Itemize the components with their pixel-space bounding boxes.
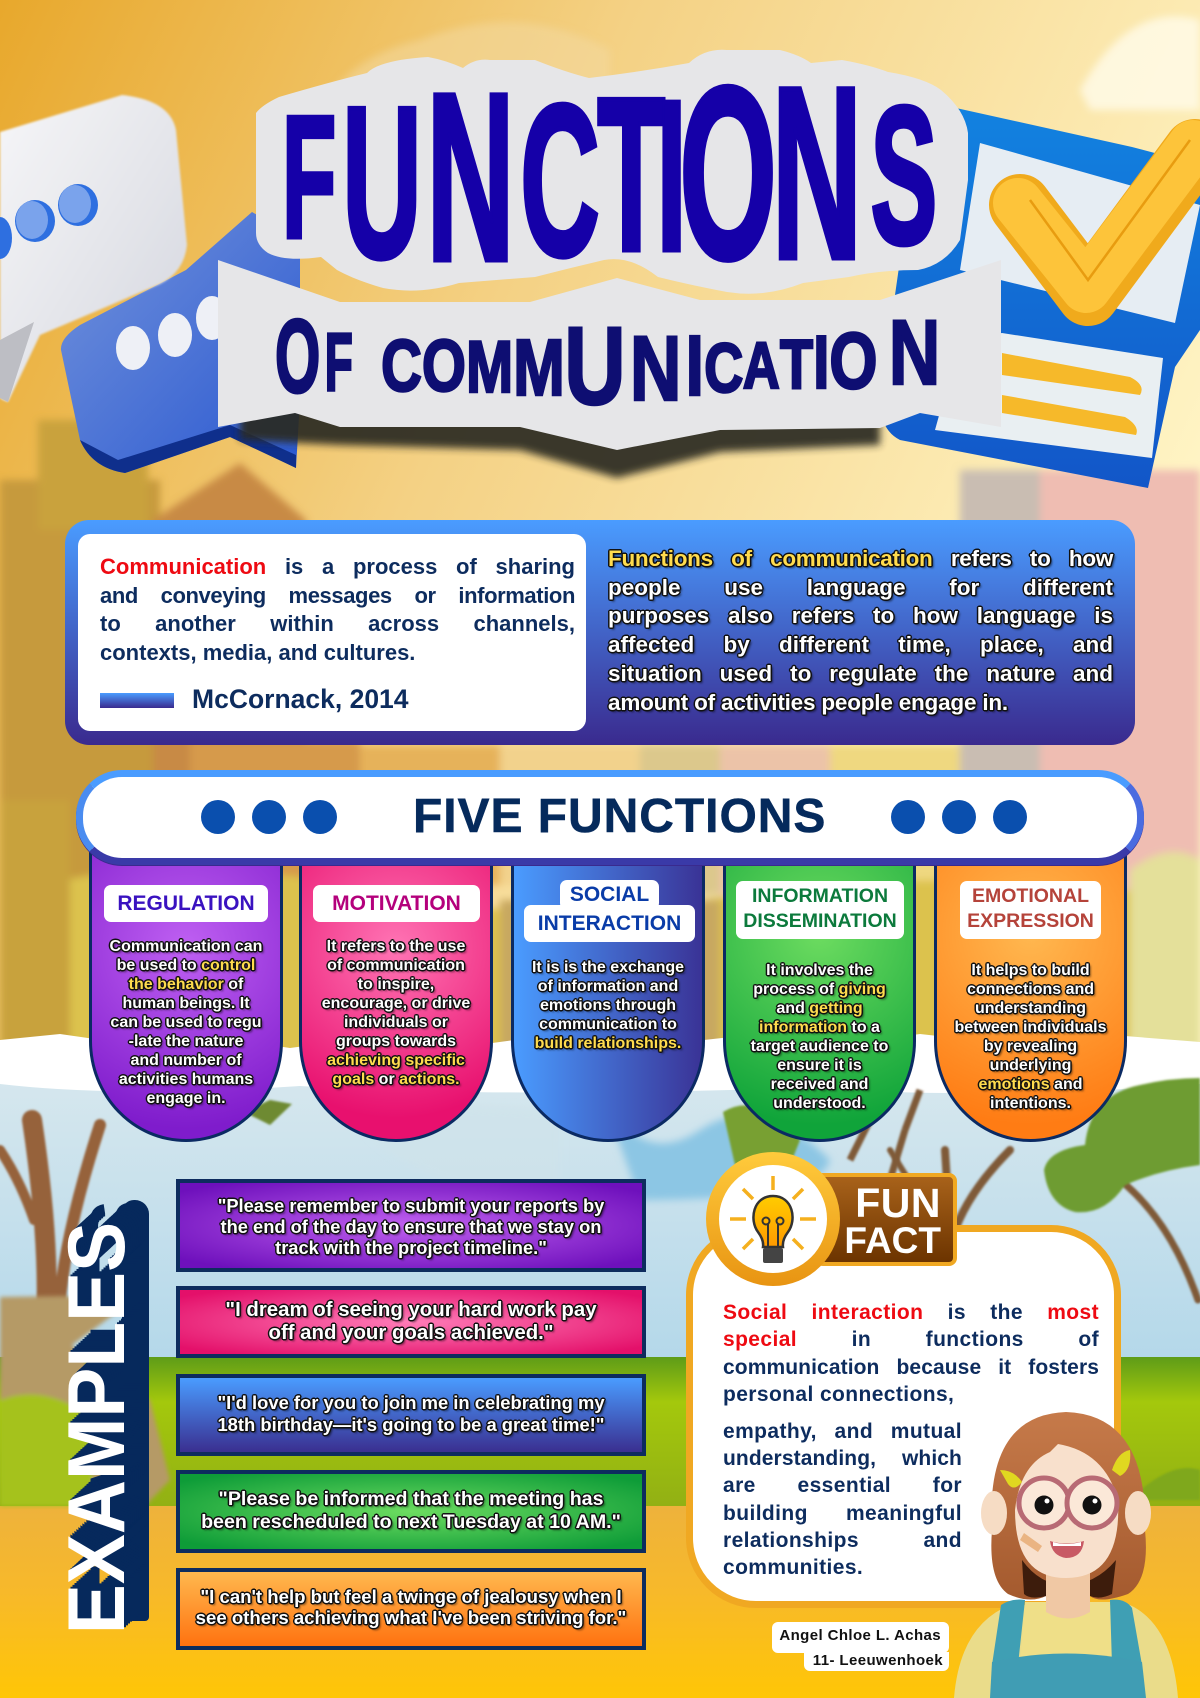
panel: fun fact: [686, 1225, 1121, 1608]
text: information dissemination: [749, 962, 891, 1112]
text: information dissemination: ensure it is: [777, 1057, 862, 1074]
credit name: [772, 1622, 949, 1653]
fun fact text continued: empathy, and mutual: [723, 1420, 962, 1443]
text: motivation: It refers to the use: [327, 938, 465, 955]
text: emotional expression: It helps to build: [971, 962, 1090, 979]
fun fact text continued: relationships and: [723, 1529, 962, 1552]
label: regulation: [104, 885, 268, 922]
example: motivation: [176, 1286, 646, 1358]
text: emotional expression: emotions and: [978, 1076, 1082, 1093]
example: emotional expression: [176, 1568, 646, 1650]
credit: [772, 1622, 949, 1671]
title: functions: O: [679, 36, 777, 311]
title: functions: S: [871, 65, 937, 285]
text: emotional expression: understanding: [975, 1000, 1086, 1017]
title: functions: [256, 36, 968, 312]
title: functions: F: [282, 81, 336, 275]
title banner: of communication: O: [422, 325, 466, 407]
example: social interaction: "I'd love for you to join me in celebrating my: [217, 1392, 605, 1413]
text: information dissemination: received and: [771, 1076, 868, 1093]
text: social interaction: [532, 959, 686, 1055]
title banner: of communication: I: [686, 319, 704, 414]
text: emotional expression: [954, 962, 1110, 1112]
fun fact text continued: understanding, which: [723, 1447, 962, 1470]
text: motivation: of communication: [327, 957, 465, 974]
dots right: [891, 800, 1027, 834]
banner shadow: [240, 400, 880, 478]
example: information dissemination: "Please be informed that the meeting has: [219, 1488, 603, 1510]
title banner: of communication: O: [829, 316, 878, 406]
title: functions: C: [520, 61, 600, 302]
title: functions: I: [656, 57, 687, 297]
fun fact text continued: [723, 1420, 962, 1579]
right trees: [890, 1078, 1200, 1500]
five functions bar: [76, 770, 1144, 865]
example: regulation: track with the project timeline.": [275, 1237, 547, 1258]
example: motivation: "I dream of seeing your hard work pay: [225, 1299, 597, 1321]
label: emotional expression: EMOTIONAL: [972, 885, 1089, 907]
title: functions: U: [342, 63, 422, 304]
text: social interaction: build relationships.: [535, 1035, 681, 1052]
title: functions: N: [772, 36, 862, 311]
definition text: functions of communication: Functions of communication refers to how: [608, 546, 1113, 571]
label: information dissemination: [736, 881, 904, 939]
definition text: functions of communication: amount of activities people engage in.: [608, 690, 1008, 715]
fun fact text: personal connections,: [723, 1383, 954, 1406]
text: emotional expression: between individuals: [954, 1019, 1107, 1036]
heading: examples: EXAMPLES: [52, 1222, 142, 1634]
fun fact text: Social interaction is the most: [723, 1301, 1099, 1324]
text: regulation: [108, 938, 265, 1110]
text: regulation: be used to control: [117, 957, 255, 974]
text: motivation: [320, 938, 473, 1091]
example: social interaction: [176, 1374, 646, 1456]
title: functions: T: [597, 52, 665, 297]
credit name: Angel Chloe L. Achas: [779, 1627, 941, 1644]
label: social interaction: SOCIAL: [570, 883, 649, 906]
text: information dissemination: information to a: [759, 1019, 880, 1036]
text: regulation: and number of: [130, 1052, 242, 1069]
fun fact text: communication because it fosters: [723, 1356, 1099, 1379]
example: social interaction: 18th birthday—it's going to be a great time!": [217, 1414, 605, 1435]
definition text: functions of communication: [607, 546, 1116, 718]
text: motivation: to inspire,: [358, 976, 434, 993]
column: regulation: [89, 845, 283, 1142]
icon: white speech bubble: [0, 95, 187, 402]
title: functions: N: [426, 45, 515, 312]
text: motivation: achieving specific: [327, 1052, 465, 1069]
text: motivation: encourage, or drive: [322, 995, 470, 1012]
title banner: of communication: C: [381, 325, 422, 407]
title banner: of communication: T: [780, 325, 813, 404]
definition text: contexts, media, and cultures.: [100, 640, 415, 664]
dots left: [201, 800, 337, 834]
label: social interaction: [524, 880, 695, 942]
definition text: functions of communication: people use language for different: [608, 575, 1113, 600]
title banner: of communication: I: [813, 321, 829, 405]
text: emotional expression: connections and: [967, 981, 1094, 998]
text: emotional expression: by revealing: [984, 1038, 1077, 1055]
text: regulation: Communication can: [110, 938, 262, 955]
definition card: communication: [78, 534, 586, 731]
text: regulation: activities humans: [119, 1071, 253, 1088]
example: regulation: [176, 1179, 646, 1272]
definition text: functions of communication: affected by different time, place, and: [608, 632, 1113, 657]
label: fun fact: FACT: [844, 1220, 941, 1261]
left rocks and bush: [0, 1296, 170, 1506]
text: social interaction: emotions through: [540, 997, 676, 1014]
example: motivation: off and your goals achieved.": [268, 1322, 554, 1344]
title banner: of communication: O: [275, 298, 320, 414]
title banner: of communication: [218, 260, 1001, 450]
icon: light bulb: [706, 1152, 840, 1286]
label: information dissemination: DISSEMINATION: [743, 910, 897, 932]
text: regulation: the behavior of: [129, 976, 243, 993]
label: emotional expression: EXPRESSION: [967, 910, 1094, 932]
citation bar: [100, 693, 174, 708]
left tree: [0, 1120, 100, 1320]
title banner: of communication: N: [889, 302, 940, 404]
trees behind the columns: [244, 1090, 920, 1180]
label: social interaction: INTERACTION: [538, 912, 681, 935]
text: information dissemination: It involves the: [766, 962, 873, 979]
title banner: of communication: M: [466, 326, 513, 408]
definition text: Communication is a process of sharing: [100, 554, 575, 579]
text: information dissemination: target audience to: [751, 1038, 888, 1055]
fun fact text continued: are essential for: [723, 1474, 962, 1497]
example: information dissemination: [176, 1470, 646, 1553]
text: regulation: engage in.: [146, 1090, 226, 1107]
title banner: of communication: N: [630, 318, 681, 420]
text: regulation: can be used to regu: [110, 1014, 262, 1031]
icon: blue speech bubble: [61, 212, 300, 473]
credit section: 11- Leeuwenhoek: [813, 1652, 943, 1669]
text: social interaction: of information and: [538, 978, 678, 995]
column: emotional expression: [934, 845, 1127, 1142]
fun fact text: [723, 1301, 1099, 1406]
text: emotional expression: underlying: [990, 1057, 1071, 1074]
label: information dissemination: INFORMATION: [752, 885, 888, 907]
text: regulation: -late the nature: [129, 1033, 243, 1050]
text: motivation: individuals or: [344, 1014, 448, 1031]
definition panel background: [65, 520, 1135, 745]
definition text: [100, 554, 575, 664]
definition text: functions of communication: situation used to regulate the nature and: [608, 661, 1113, 686]
citation: McCornack, 2014: [192, 684, 409, 714]
label: motivation: [313, 885, 480, 922]
label: regulation: REGULATION: [117, 892, 255, 915]
example: regulation: the end of the day to ensure that we stay on: [221, 1216, 601, 1237]
title banner: of communication: U: [564, 304, 626, 427]
title banner: of communication: C: [704, 329, 743, 408]
text: information dissemination: understood.: [773, 1095, 866, 1112]
label: emotional expression: [960, 881, 1101, 939]
title banner: of communication: A: [743, 330, 780, 403]
example: emotional expression: "I can't help but feel a twinge of jealousy when I: [200, 1586, 622, 1607]
fun fact text continued: building meaningful: [723, 1502, 962, 1525]
definition text: functions of communication: purposes also refers to how language is: [608, 603, 1113, 628]
title banner: of communication: F: [325, 317, 353, 409]
definition text: and conveying messages or information: [100, 582, 575, 608]
text: information dissemination: and getting: [776, 1000, 863, 1017]
text: motivation: goals or actions.: [332, 1071, 460, 1088]
fun fact text continued: communities.: [723, 1556, 863, 1579]
heading: five functions: FIVE FUNCTIONS: [413, 790, 826, 843]
definition text: to another within across channels,: [100, 611, 575, 636]
fun fact text: special in functions of: [723, 1328, 1099, 1351]
text: regulation: human beings. It: [122, 995, 250, 1012]
text: emotional expression: intentions.: [990, 1095, 1071, 1112]
example: information dissemination: been rescheduled to next Tuesday at 10 AM.": [201, 1511, 621, 1533]
column: information dissemination: [723, 845, 916, 1142]
examples heading backing: [122, 1200, 149, 1621]
icon: blue checklist card: [880, 108, 1200, 488]
column: motivation: [299, 845, 493, 1142]
column: social interaction: [511, 845, 705, 1142]
title banner: of communication: M: [513, 323, 565, 413]
text: information dissemination: process of giving: [753, 981, 886, 998]
label: fun fact: FUN: [855, 1180, 941, 1226]
label: fun fact: [815, 1173, 957, 1266]
text: social interaction: communication to: [539, 1016, 677, 1033]
example: regulation: "Please remember to submit your reports by: [218, 1195, 604, 1216]
text: social interaction: It is is the exchange: [532, 959, 684, 976]
text: motivation: groups towards: [336, 1033, 456, 1050]
label: motivation: MOTIVATION: [332, 892, 461, 915]
example: emotional expression: see others achieving what I've been striving for.": [196, 1607, 626, 1628]
